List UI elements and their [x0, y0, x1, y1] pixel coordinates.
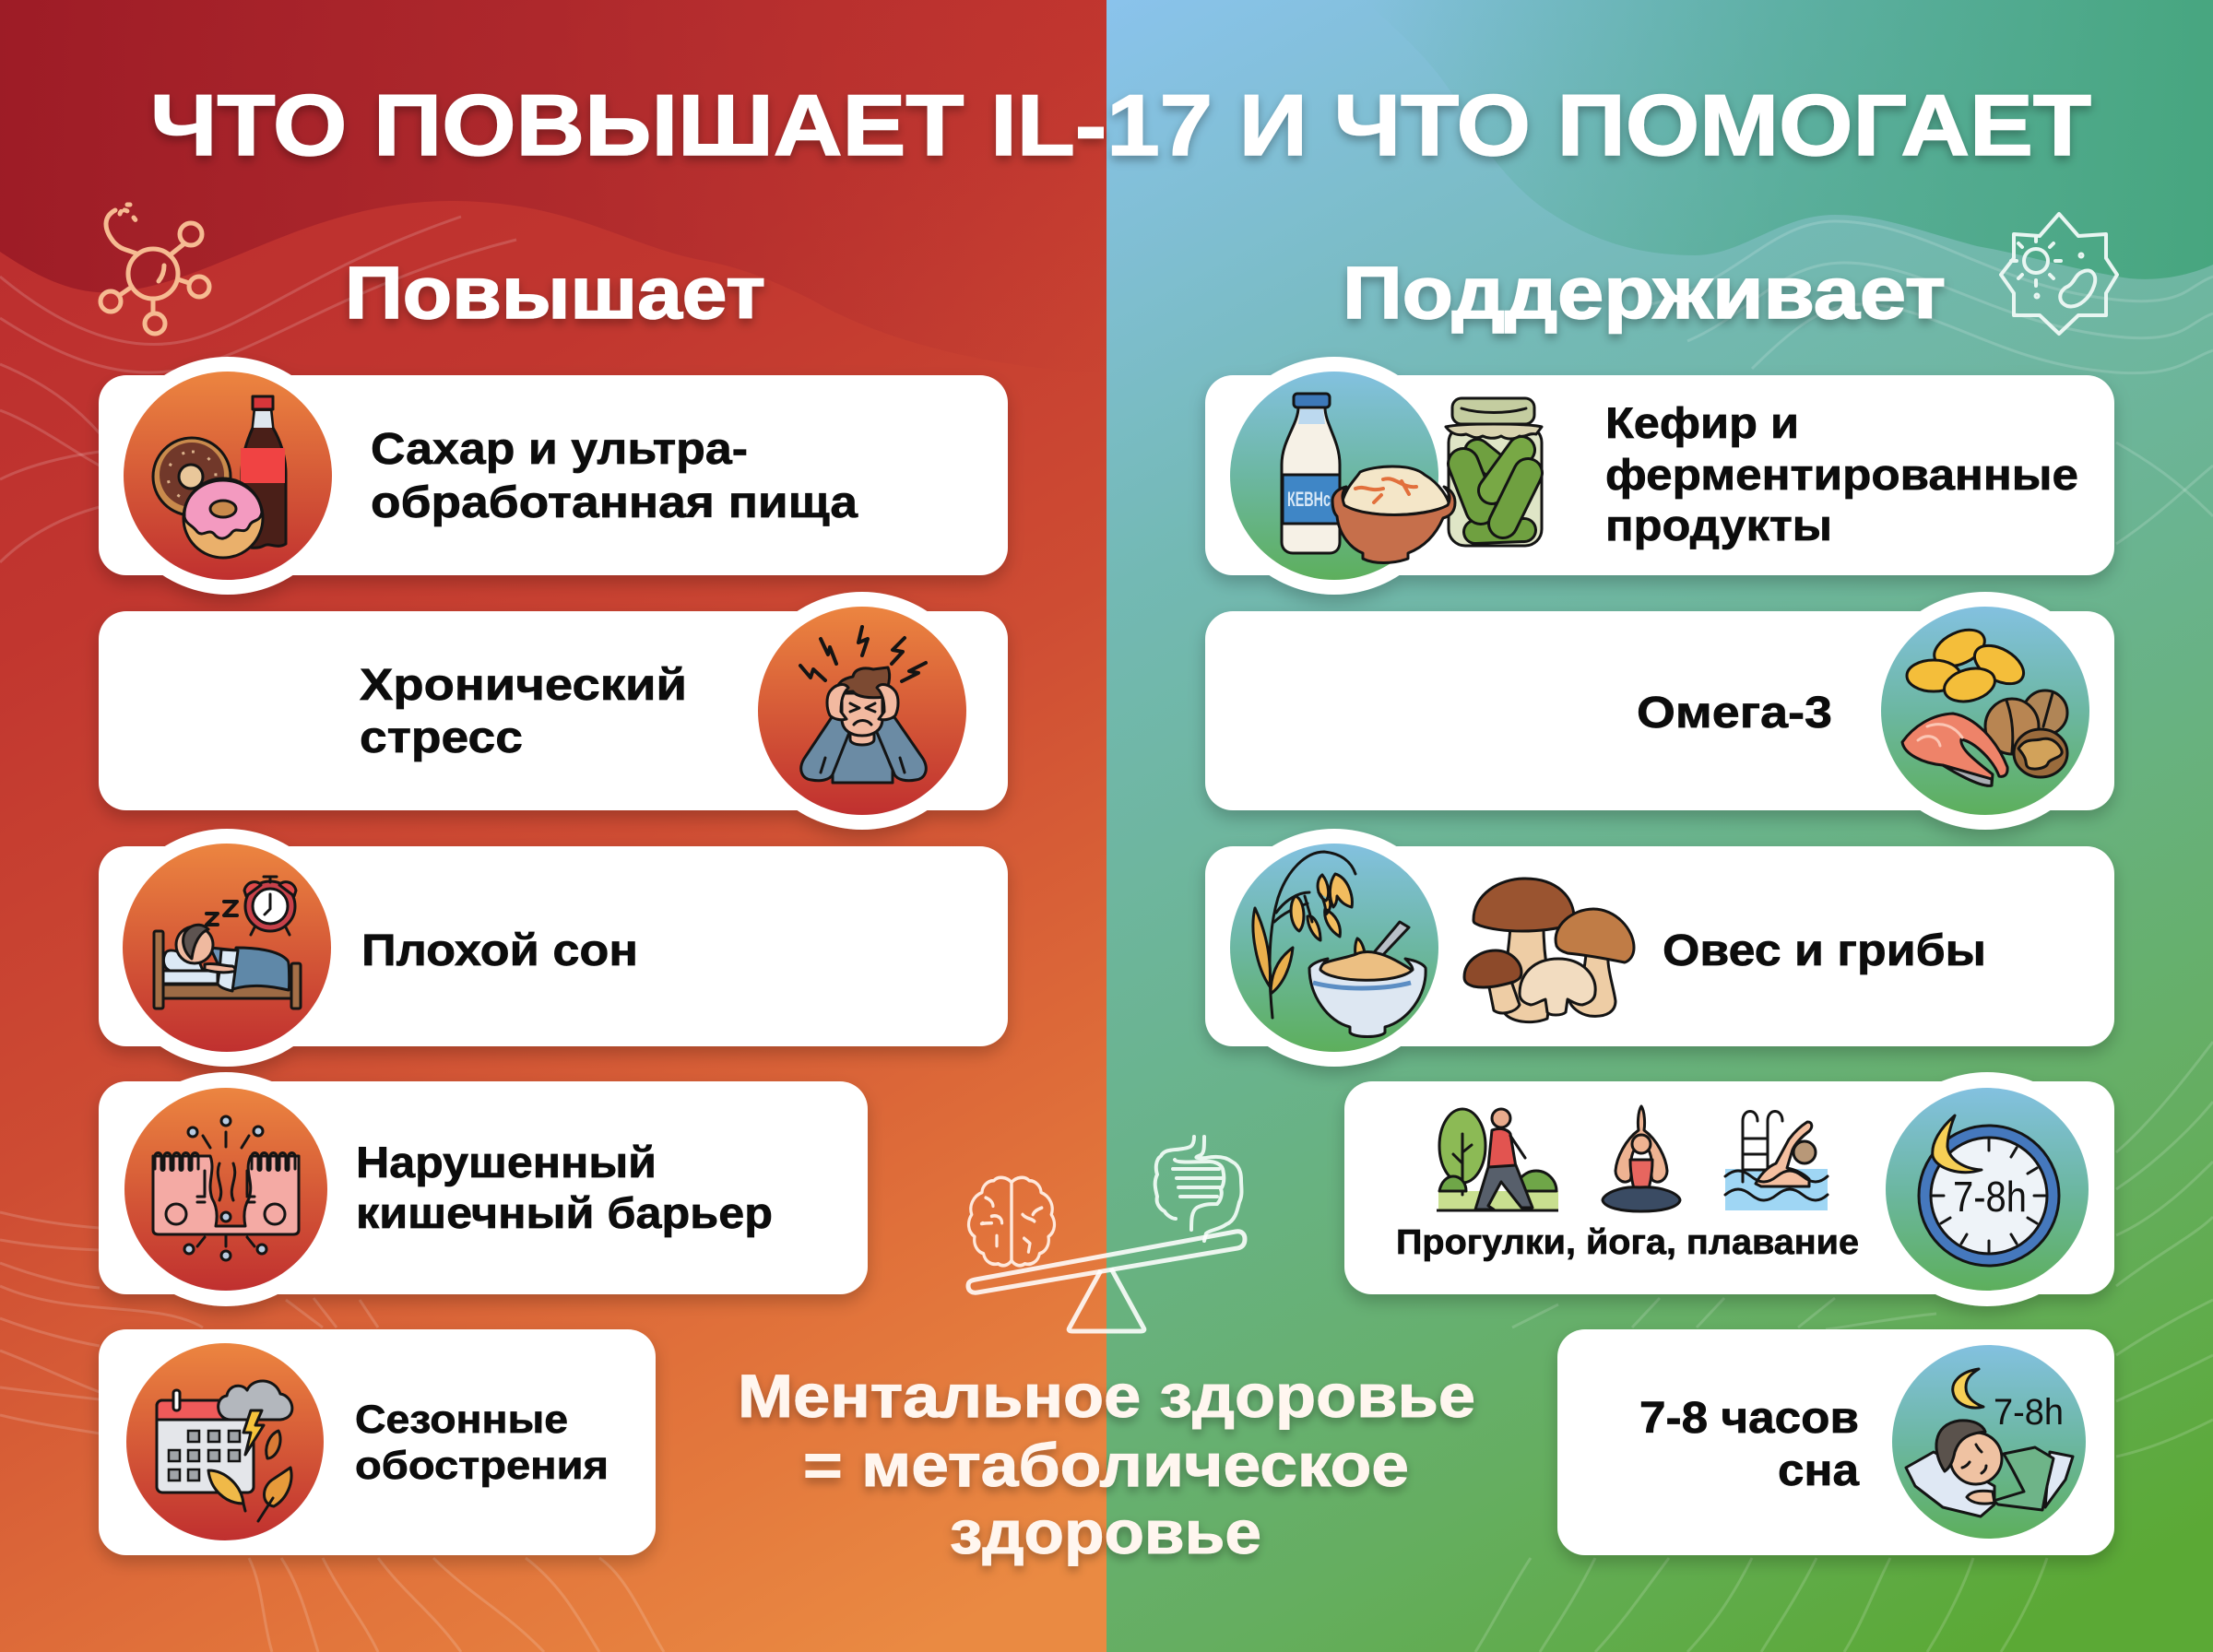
icon: calendar, storm cloud and leaves	[157, 1381, 292, 1521]
text: ферментированные	[1605, 450, 2078, 499]
caption: mental health equals metabolic health: = метаболическое	[803, 1431, 1409, 1499]
icon: stressed man	[800, 627, 926, 783]
text: Сахар и ультра-	[371, 425, 748, 474]
icon circle	[123, 844, 331, 1052]
background: left red-orange half	[0, 0, 1106, 1652]
icon circle	[1881, 607, 2089, 815]
card: walking, yoga, swimming	[1344, 1072, 2114, 1306]
card background	[99, 357, 1008, 595]
caption: mental health equals metabolic health	[738, 1362, 1475, 1566]
icon: sleeping person with moon: 7-8h	[1994, 1392, 2064, 1433]
title: ЧТО ПОВЫШАЕТ IL-17 И ЧТО ПОМОГАЕТ	[150, 77, 2091, 173]
text: кишечный барьер	[356, 1188, 773, 1237]
text	[355, 1398, 609, 1488]
icon: balance scale	[968, 1232, 1245, 1331]
icon: sleeping person with moon	[1906, 1369, 2073, 1516]
card background	[1205, 829, 2114, 1067]
icon circle	[1230, 372, 1438, 580]
card background	[99, 592, 1008, 830]
text	[356, 1138, 773, 1237]
card: kefir and fermented foods	[1205, 357, 2114, 595]
heading: supports: Поддерживает	[1343, 252, 1946, 334]
icon: donuts and cola	[153, 396, 286, 558]
card background	[1205, 592, 2114, 830]
card: poor sleep	[99, 829, 1008, 1067]
heading: raises: Повышает	[345, 252, 765, 334]
icon circle	[1230, 844, 1438, 1052]
text: Нарушенный	[356, 1138, 657, 1186]
text: продукты	[1605, 501, 1832, 549]
text	[360, 661, 687, 762]
card background	[1205, 357, 2114, 595]
icon circle	[1886, 1088, 2089, 1291]
icon: kefir bottle, sauerkraut bowl and pickle jar: КЕВНс	[1287, 488, 1331, 511]
text	[1639, 1394, 1859, 1495]
icon circle	[758, 607, 966, 815]
text: Плохой сон	[361, 926, 638, 975]
text: Сезонные	[355, 1398, 568, 1442]
icon: swimmer and pool ladder	[1725, 1112, 1828, 1210]
text: обработанная пища	[371, 478, 858, 527]
icon: person in bed with alarm clock	[154, 877, 301, 1009]
icon: molecule network	[101, 205, 209, 334]
text: Прогулки, йога, плавание	[1396, 1223, 1859, 1262]
icon: walking person in park	[1437, 1109, 1558, 1210]
card: chronic stress	[99, 592, 1008, 830]
icon: damaged intestinal barrier	[153, 1116, 299, 1260]
icon: microbes badge	[2001, 214, 2117, 334]
icon circle	[124, 372, 332, 580]
text: сна	[1778, 1446, 1859, 1495]
text: Омега-3	[1637, 689, 1832, 738]
icon: soybeans, salmon and walnuts	[1902, 622, 2067, 785]
text: обострения	[355, 1444, 609, 1488]
icon circle	[124, 1088, 327, 1291]
card background	[1344, 1072, 2114, 1306]
text: Кефир и	[1605, 398, 1799, 447]
background: right blue-green half	[1106, 0, 2213, 1652]
text	[371, 425, 858, 527]
text	[1605, 398, 2078, 549]
card: omega-3	[1205, 592, 2114, 830]
icon circle	[126, 1343, 324, 1540]
card background	[99, 829, 1008, 1067]
icon: intestines	[1155, 1137, 1241, 1241]
icon: brain	[969, 1177, 1054, 1266]
card background	[99, 1072, 868, 1306]
text: Хронический	[360, 661, 687, 710]
icon: clock with moon: 7-8h	[1953, 1173, 2027, 1221]
icon: mushrooms	[1464, 879, 1634, 1022]
card: seasonal flare-ups	[99, 1329, 656, 1555]
card background	[99, 1329, 656, 1555]
card: impaired gut barrier	[99, 1072, 868, 1306]
icon: clock with moon	[1919, 1115, 2059, 1266]
icon: oat stalk and porridge bowl	[1253, 852, 1426, 1036]
card: oats and mushrooms	[1205, 829, 2114, 1067]
text: стресс	[360, 714, 523, 762]
card background	[1557, 1329, 2114, 1555]
caption: mental health equals metabolic health: здоровье	[950, 1498, 1261, 1566]
text: Овес и грибы	[1663, 926, 1986, 975]
icon: yoga pose	[1603, 1106, 1680, 1211]
icon: kefir bottle, sauerkraut bowl and pickle jar	[1282, 394, 1542, 562]
card: sugar and ultra-processed food	[99, 357, 1008, 595]
card: 7-8 hours of sleep	[1557, 1329, 2114, 1555]
caption: mental health equals metabolic health: Ментальное здоровье	[738, 1362, 1475, 1430]
icon circle	[1892, 1345, 2086, 1539]
text: 7-8 часов	[1639, 1394, 1859, 1443]
